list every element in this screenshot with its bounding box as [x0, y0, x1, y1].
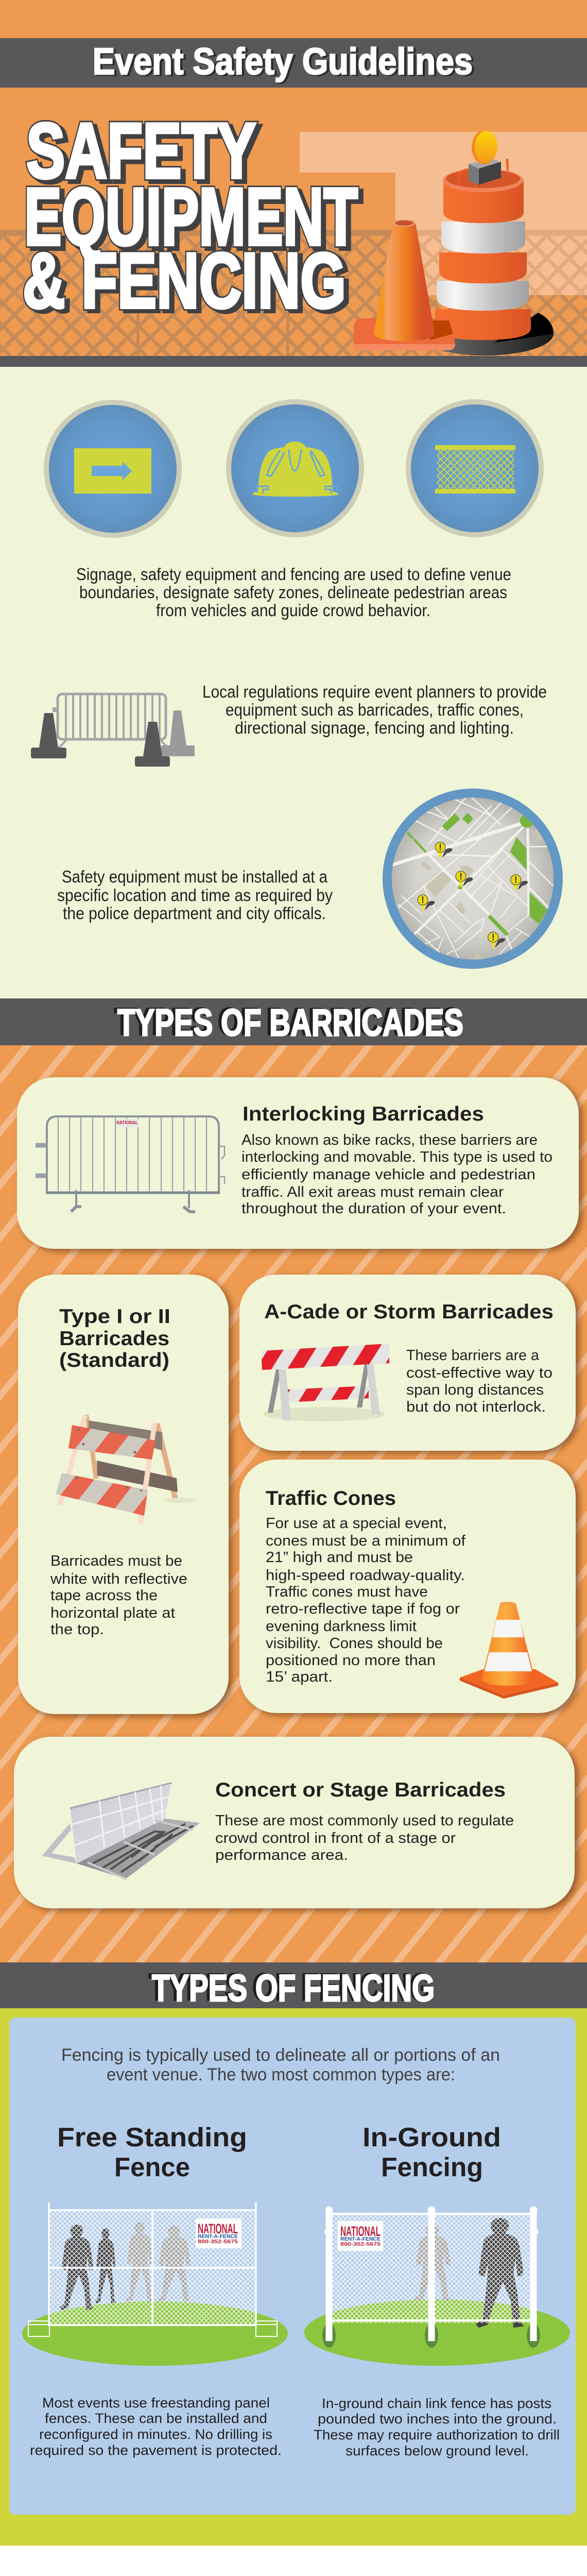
install text: specific location and time as required by	[57, 886, 333, 905]
section header: barricades	[0, 998, 587, 1045]
body text	[406, 1347, 553, 1415]
section header: barricades: TYPES OF BARRICADES	[117, 1002, 463, 1044]
fence sign: RENT-A-FENCE	[340, 2236, 381, 2242]
text: in-ground: pounded two inches into the ground.	[318, 2411, 557, 2427]
body text: positioned no more than	[266, 1652, 436, 1669]
fence sign: 800-352-5675	[198, 2239, 238, 2245]
heading: free standing: Free Standing	[57, 2123, 247, 2153]
intro text: Fencing is typically used to delineate all or portions of an	[61, 2045, 500, 2065]
panel: type I or II barricades	[18, 1275, 229, 1714]
body text: These barriers are a	[406, 1347, 540, 1364]
fence sign: 800-352-5675	[340, 2241, 381, 2247]
body text: Traffic cones must have	[266, 1584, 428, 1600]
hero title: EQUIPMENT	[28, 175, 362, 265]
intro text	[76, 565, 511, 620]
text: in-ground: These may require authorization to drill	[314, 2427, 560, 2443]
install text: the police department and city officals.	[63, 904, 326, 923]
heading: in-ground: In-Ground	[362, 2123, 501, 2153]
intro text	[61, 2045, 500, 2084]
heading: Interlocking Barricades	[243, 1103, 484, 1125]
body text	[215, 1812, 514, 1863]
illustration: traffic barrel	[417, 130, 554, 355]
regulations text: equipment such as barricades, traffic cones,	[226, 700, 524, 719]
panel: concert barricades	[14, 1737, 575, 1908]
heading: free standing	[57, 2123, 247, 2182]
body text: Barricades must be	[50, 1553, 182, 1569]
free standing fence illustration	[22, 2202, 288, 2366]
a-frame illustration	[261, 1344, 389, 1421]
map illustration	[383, 788, 563, 969]
text: free standing: Most events use freestanding panel	[42, 2395, 270, 2411]
intro text: from vehicles and guide crowd behavior.	[156, 601, 430, 620]
heading: A-Cade or Storm Barricades	[264, 1301, 554, 1323]
install text: Safety equipment must be installed at a	[62, 867, 328, 886]
hero title: SAFETY	[26, 107, 256, 195]
heading: in-ground	[362, 2123, 501, 2182]
text: in-ground: In-ground chain link fence has posts	[322, 2396, 551, 2411]
text: free standing: required so the pavement is protected.	[30, 2443, 282, 2458]
body text: the top.	[50, 1621, 104, 1638]
hero title: EQUIPMENT	[24, 172, 358, 262]
illustration: traffic cone	[354, 219, 455, 350]
section header: fencing: TYPES OF FENCING	[149, 1967, 432, 2008]
body text: These are most commonly used to regulate	[215, 1812, 514, 1829]
text: in-ground: surfaces below ground level.	[346, 2443, 529, 2459]
in-ground fence illustration	[304, 2206, 570, 2366]
hero title: & FENCING	[23, 237, 346, 325]
banner title: Event Safety Guidelines	[93, 41, 473, 82]
icon: hard hat	[226, 399, 364, 537]
heading: Concert or Stage Barricades	[215, 1779, 506, 1801]
icon: fence	[406, 399, 544, 537]
panel: interlocking barricades: NATIONAL	[116, 1120, 138, 1125]
heading	[59, 1306, 170, 1371]
install text	[57, 867, 333, 923]
section header: barricades: TYPES OF BARRICADES	[114, 1001, 460, 1043]
stage barrier illustration	[42, 1782, 200, 1879]
panel: a-cade barricades	[239, 1275, 576, 1451]
section header: fencing	[0, 1962, 587, 2009]
hero title: & FENCING	[23, 237, 346, 325]
text: free standing: reconfigured in minutes. No drilling is	[39, 2427, 272, 2442]
body text: high-speed roadway-quality.	[266, 1567, 465, 1584]
body text	[266, 1515, 466, 1685]
panel: interlocking barricades	[17, 1077, 579, 1249]
body text: evening darkness limit	[266, 1618, 417, 1635]
panel: fencing	[9, 2018, 576, 2515]
hero title	[23, 107, 362, 327]
intro text: event venue. The two most common types are:	[107, 2065, 455, 2084]
hero title: EQUIPMENT	[24, 172, 358, 262]
hero title: SAFETY	[26, 107, 256, 195]
body text: retro-reflective tape if fog or	[266, 1601, 460, 1617]
body text: span long distances	[406, 1382, 544, 1398]
green background	[0, 2008, 587, 2546]
intro background	[0, 367, 587, 998]
body text: traffic. All exit areas must remain clear	[241, 1184, 504, 1200]
body text: tape across the	[50, 1587, 158, 1604]
text: free standing	[30, 2395, 282, 2458]
intro text: Signage, safety equipment and fencing are used to define venue	[76, 565, 511, 584]
heading: Barricades	[59, 1328, 169, 1350]
hero title: SAFETY	[30, 110, 260, 198]
heading: Traffic Cones	[266, 1487, 396, 1510]
regulations text: directional signage, fencing and lighting.	[235, 718, 514, 737]
body text: crowd control in front of a stage or	[215, 1830, 456, 1846]
body text: 21” high and must be	[266, 1549, 413, 1566]
hero title: & FENCING	[27, 240, 350, 327]
header background	[0, 0, 587, 367]
body text: visibility. Cones should be	[266, 1635, 443, 1652]
heading: Type I or II	[59, 1306, 170, 1328]
bike rack	[36, 1116, 225, 1212]
body text: Also known as bike racks, these barriers are	[241, 1132, 538, 1148]
body text: performance area.	[215, 1847, 348, 1863]
intro text: boundaries, designate safety zones, delineate pedestrian areas	[79, 583, 507, 602]
hero fence	[0, 230, 587, 356]
body text: horizontal plate at	[50, 1605, 175, 1621]
icon: barricade with cones	[31, 694, 195, 767]
section header: fencing: TYPES OF FENCING	[152, 1968, 435, 2009]
body text: throughout the duration of your event.	[241, 1200, 506, 1217]
body text: 15’ apart.	[266, 1669, 333, 1685]
text: free standing: fences. These can be installed and	[45, 2411, 267, 2426]
striped orange background	[0, 1045, 587, 1962]
hero base bar	[0, 356, 587, 367]
hero light band	[300, 132, 587, 295]
body text	[50, 1553, 187, 1638]
regulations text	[202, 682, 547, 737]
panel: traffic cones	[239, 1460, 576, 1713]
body text: cost-effective way to	[406, 1365, 553, 1381]
body text: cones must be a minimum of	[266, 1533, 466, 1549]
body text: For use at a special event,	[266, 1515, 447, 1532]
heading: (Standard)	[59, 1349, 169, 1371]
fence sign: NATIONAL	[198, 2221, 238, 2236]
body text	[241, 1132, 553, 1217]
heading: in-ground: Fencing	[381, 2153, 483, 2182]
top banner	[0, 38, 587, 88]
fence sign	[196, 2218, 241, 2248]
heading: free standing: Fence	[114, 2153, 190, 2182]
barricade illustration	[56, 1415, 197, 1524]
body text: white with reflective	[50, 1571, 187, 1587]
body text: but do not interlock.	[406, 1399, 546, 1415]
fence sign: NATIONAL	[340, 2224, 381, 2239]
top banner: Event Safety Guidelines	[95, 42, 475, 83]
text: in-ground	[314, 2396, 560, 2459]
fence sign: RENT-A-FENCE	[198, 2234, 238, 2240]
body text: efficiently manage vehicle and pedestrian	[241, 1166, 536, 1183]
regulations text: Local regulations require event planners to provide	[202, 682, 547, 701]
fence sign	[338, 2221, 383, 2251]
cone illustration	[460, 1602, 558, 1699]
body text: interlocking and movable. This type is used to	[241, 1149, 553, 1165]
icon: arrow sign	[44, 400, 182, 538]
